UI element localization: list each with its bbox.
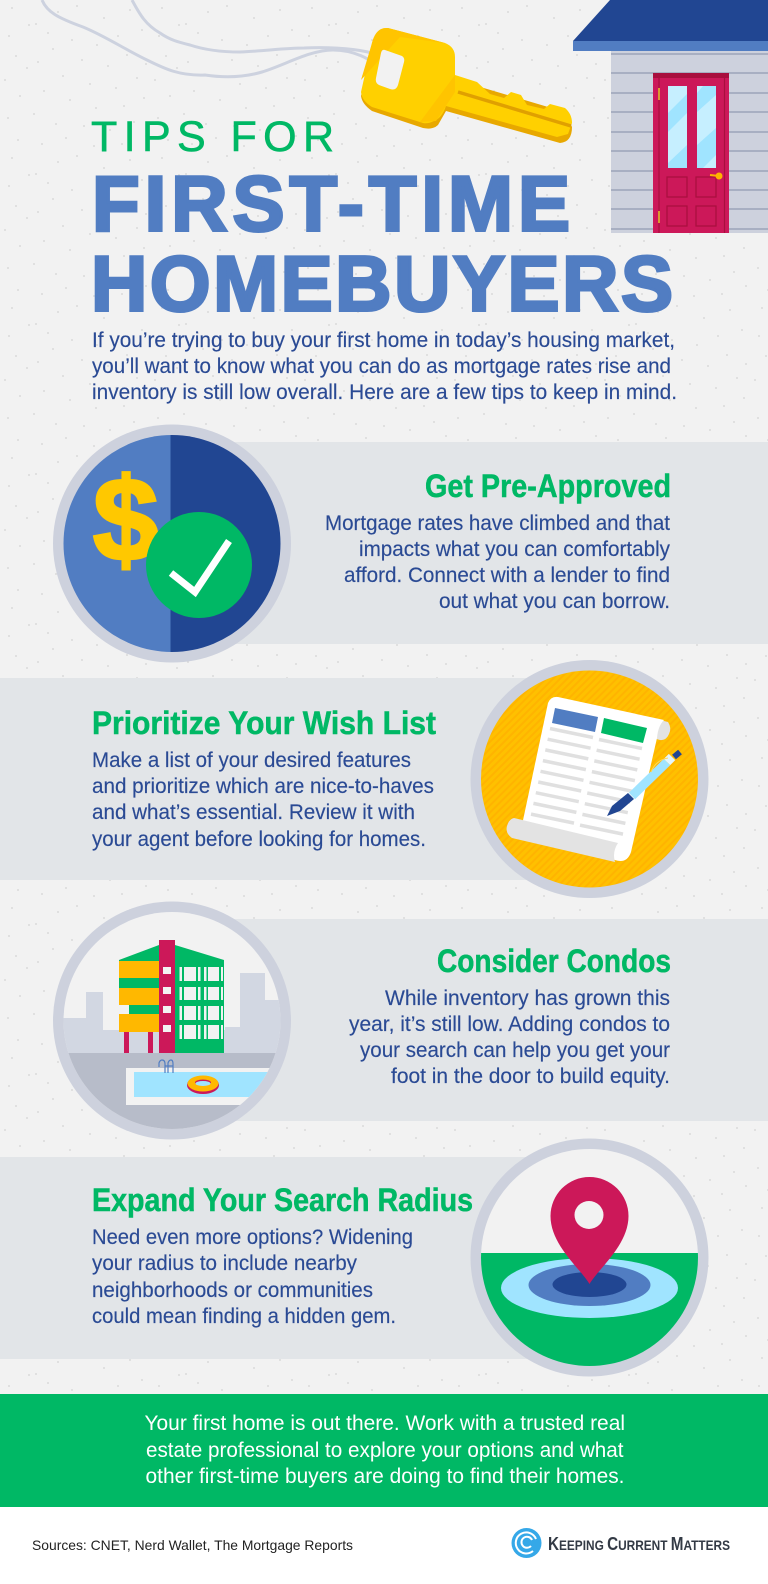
body text: get pre-approved: Mortgage rates have climbed and that xyxy=(325,511,670,535)
panel: closing call to action xyxy=(0,1394,768,1507)
body text: consider condos: foot in the door to build equity. xyxy=(391,1064,670,1088)
heading: consider condos: Consider Condos xyxy=(437,943,671,979)
logo wordmark: KEEPING CURRENT MATTERS xyxy=(548,1534,730,1554)
body text: consider condos: your search can help you get your xyxy=(360,1038,670,1062)
body text: wish list: and what’s essential. Review it with xyxy=(92,800,415,824)
body text: wish list: your agent before looking for homes. xyxy=(92,827,426,851)
icon: house with door xyxy=(573,0,768,233)
body text: get pre-approved: out what you can borrow. xyxy=(439,589,670,613)
icon: dollar and check badge xyxy=(53,424,291,662)
panel: get pre-approved xyxy=(53,424,768,662)
body text: search radius: could mean finding a hidden gem. xyxy=(92,1304,396,1328)
panel: expand your search radius xyxy=(0,1138,708,1376)
heading: get pre-approved: Get Pre-Approved xyxy=(425,468,671,504)
sources: Sources: CNET, Nerd Wallet, The Mortgage Reports xyxy=(32,1537,353,1553)
intro text: If you’re trying to buy your first home in today’s housing market, xyxy=(92,328,675,352)
icon: condo building with pool xyxy=(53,902,291,1140)
panel: closing call to action: Your first home is out there. Work with a trusted real xyxy=(144,1411,625,1435)
panel: closing call to action: estate professional to explore your options and what xyxy=(146,1438,624,1462)
title line: first-time: FIRST-TIME xyxy=(92,160,570,248)
body text: consider condos: While inventory has grown this xyxy=(385,986,670,1010)
intro text xyxy=(92,328,677,404)
title line: tips for: TIPS FOR xyxy=(91,113,334,161)
body text: search radius: your radius to include nearby xyxy=(92,1251,357,1275)
icon: logo swirl xyxy=(512,1528,542,1558)
icon: checklist and pen xyxy=(470,660,708,898)
panel: closing call to action: other first-time buyers are doing to find their homes. xyxy=(146,1464,624,1488)
body text: consider condos: year, it’s still low. Adding condos to xyxy=(349,1012,670,1036)
icon: key with strings xyxy=(42,0,572,143)
body text: get pre-approved xyxy=(325,511,670,613)
body text: wish list xyxy=(92,748,434,851)
body text: get pre-approved: afford. Connect with a lender to find xyxy=(344,563,670,587)
body text: wish list: and prioritize which are nice-to-haves xyxy=(92,774,434,798)
body text: search radius: Need even more options? Widening xyxy=(92,1225,413,1249)
heading: prioritize your wish list: Prioritize Your Wish List xyxy=(92,705,436,741)
body text: consider condos xyxy=(349,986,670,1088)
title xyxy=(91,113,673,328)
intro text: you’ll want to know what you can do as mortgage rates rise and xyxy=(92,354,671,378)
icon: dollar and check badge: $ xyxy=(93,454,159,586)
panel: prioritize your wish list xyxy=(0,660,708,898)
panel: footer xyxy=(0,1507,768,1584)
intro text: inventory is still low overall. Here are a few tips to keep in mind. xyxy=(92,380,677,404)
body text: search radius xyxy=(92,1225,413,1328)
icon: map pin on radius rings xyxy=(470,1138,708,1376)
panel: consider condos xyxy=(53,902,768,1140)
body text: get pre-approved: impacts what you can comfortably xyxy=(359,537,670,561)
body text: wish list: Make a list of your desired features xyxy=(92,748,411,772)
body text: search radius: neighborhoods or communities xyxy=(92,1278,373,1302)
title line: homebuyers: HOMEBUYERS xyxy=(91,240,673,328)
heading: expand your search radius: Expand Your Search Radius xyxy=(92,1182,473,1218)
